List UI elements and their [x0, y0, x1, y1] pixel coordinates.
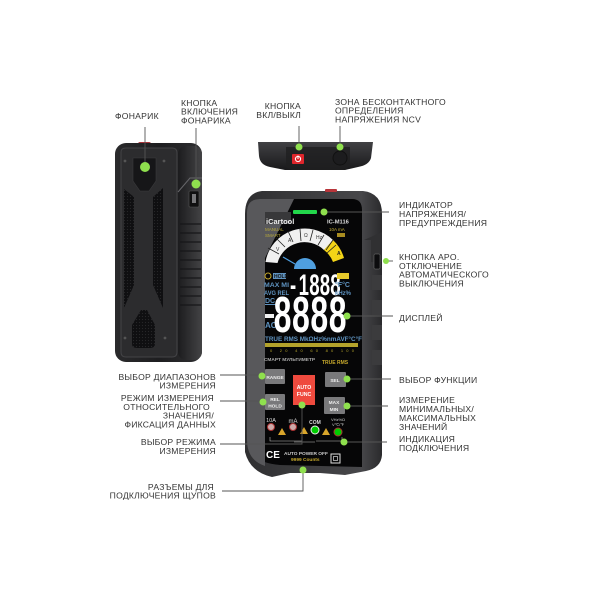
multimeter front: HOLD: [274, 274, 289, 280]
multimeter front: SMART: [265, 233, 281, 238]
red top button: [325, 189, 337, 192]
multimeter front: 9999 Counts: [291, 457, 320, 463]
label: NCV zone: ЗОНА БЕСКОНТАКТНОГО: [335, 97, 446, 107]
power button: [292, 154, 304, 164]
label: NCV zone: ОПРЕДЕЛЕНИЯ: [335, 106, 404, 116]
dial needle: [283, 257, 295, 264]
multimeter front: MAX: [329, 400, 340, 406]
rotary dial: Hz: [316, 235, 323, 241]
label: relative mode and data hold: ФИКСАЦИЯ ДАННЫХ: [124, 419, 216, 429]
multimeter front: AVG REL: [264, 290, 289, 297]
label: APO button: АВТОМАТИЧЕСКОГО: [399, 270, 489, 280]
label: measurement mode: ИЗМЕРЕНИЯ: [159, 446, 216, 456]
leader: flashlight: [140, 127, 150, 172]
multimeter front: IC-M116: [327, 220, 350, 226]
label: APO button: КНОПКА APO.: [399, 252, 460, 262]
terminals: V℃/℉: [332, 422, 344, 427]
mode labels: MANUAL: [265, 227, 284, 232]
leader: rel hold: [220, 398, 266, 406]
multimeter front: REL: [270, 397, 280, 403]
terminals: COM: [309, 420, 321, 426]
CE mark: CE: [266, 450, 280, 461]
multimeter front: AUTO: [297, 385, 311, 391]
minus sign: [265, 314, 274, 318]
device back view: [115, 142, 202, 362]
vents: [124, 189, 134, 308]
label: measurement mode: ВЫБОР РЕЖИМА: [141, 437, 216, 447]
dial symbols: V: [276, 247, 280, 253]
red top accent: [138, 142, 151, 147]
terminals: [266, 417, 345, 442]
label: voltage indicator: ИНДИКАТОР: [399, 200, 453, 210]
label: function select: ВЫБОР ФУНКЦИИ: [399, 375, 477, 385]
label: voltage indicator: ПРЕДУПРЕЖДЕНИЯ: [399, 218, 487, 228]
REL HOLD button: [265, 394, 285, 410]
NCV zone: [333, 151, 347, 165]
status icons: [265, 273, 271, 279]
label: probe sockets: РАЗЪЕМЫ ДЛЯ: [148, 482, 214, 492]
multimeter front: [245, 189, 382, 477]
label: flashlight button: КНОПКА: [181, 98, 217, 108]
voltage indicator bar: [293, 210, 317, 214]
SEL button: [325, 372, 346, 387]
multimeter front: MIN: [330, 407, 339, 413]
left indicators: MAX MI: [264, 282, 289, 289]
label: relative mode and data hold: ЗНАЧЕНИЯ/: [163, 411, 214, 421]
label: min max: МАКСИМАЛЬНЫХ: [399, 413, 476, 423]
leader: NCV zone: [336, 126, 344, 150]
multimeter front: 0 20 40 60 80 100: [270, 348, 355, 353]
leader: flashlight button: [192, 128, 200, 188]
leader: sel: [344, 376, 391, 382]
leader: measurement mode: [220, 402, 306, 444]
label: flashlight button: ВКЛЮЧЕНИЯ: [181, 107, 238, 117]
label: connection indication: ПОДКЛЮЧЕНИЯ: [399, 443, 469, 453]
multimeter front: DC: [265, 298, 275, 305]
label: display: ДИСПЛЕЙ: [399, 312, 443, 323]
leader: voltage indicator: [320, 208, 389, 216]
screws: [124, 160, 126, 162]
label: connection indication: ИНДИКАЦИЯ: [399, 434, 455, 444]
label: voltage indicator: НАПРЯЖЕНИЯ/: [399, 209, 467, 219]
label: probe sockets: ПОДКЛЮЧЕНИЯ ЩУПОВ: [110, 491, 216, 501]
APO side button: [374, 254, 380, 269]
label: power button: КНОПКА: [265, 101, 301, 111]
label: power button: ВКЛ/ВЫКЛ: [256, 110, 301, 120]
label: relative mode and data hold: ОТНОСИТЕЛЬНОГО: [123, 402, 210, 412]
label: flashlight button: ФОНАРИКА: [181, 115, 231, 125]
multimeter front: AC: [265, 321, 277, 330]
side ribs: [180, 224, 201, 305]
flashlight module: [133, 158, 156, 191]
double insulation mark: [331, 454, 340, 463]
body: [245, 191, 382, 477]
label: min max: МИНИМАЛЬНЫХ/: [399, 404, 474, 414]
device top view: [258, 142, 373, 170]
label: range select: ВЫБОР ДИАПАЗОНОВ: [118, 372, 216, 382]
rotary dial: A: [337, 251, 341, 257]
leader: power button: [296, 126, 302, 150]
label: min max: ЗНАЧЕНИЙ: [399, 421, 447, 432]
multimeter front: °F°C: [335, 281, 350, 289]
multimeter front: FUNC: [297, 392, 311, 398]
screen panel: [247, 199, 362, 467]
unit row: TRUE RMS MkΩHz%nmAVF°C°F: [265, 335, 362, 343]
AUTO FUNC button: [293, 375, 315, 405]
multimeter front: SEL: [330, 378, 340, 384]
label: NCV zone: НАПРЯЖЕНИЯ NCV: [335, 114, 421, 124]
multimeter front: HOLD: [268, 404, 282, 410]
bar graph: [265, 343, 358, 347]
multimeter front: kHz%: [335, 291, 352, 297]
leader: display: [344, 312, 393, 320]
main readout: 8888: [274, 287, 346, 343]
rotary dial: Ω: [304, 233, 308, 239]
terminals: VHz%Ω: [331, 417, 345, 422]
rotary dial: [266, 229, 344, 263]
secondary readout: -1888: [290, 270, 341, 302]
multimeter front: RANGE: [266, 375, 284, 381]
glossy reflection: [247, 199, 294, 466]
terminals: 10A: [266, 418, 276, 424]
multimeter front: TRUE RMS: [322, 360, 349, 366]
leader: probe sockets: [222, 466, 306, 491]
label: min max: ИЗМЕРЕНИЕ: [399, 395, 455, 405]
rotary dial: A: [288, 238, 292, 244]
product caption: СМАРТ МУЛЬТИМЕТР: [264, 357, 316, 363]
leader: APO button: [383, 258, 393, 264]
label: flashlight: ФОНАРИК: [115, 111, 159, 121]
leader: max min: [344, 402, 388, 410]
auto power off text: AUTO POWER OFF: [284, 451, 328, 457]
flashlight switch: [189, 191, 199, 207]
dial half disc: [294, 258, 316, 269]
multimeter front: 10A mA: [329, 227, 345, 232]
RANGE button: [265, 369, 285, 384]
leader: range: [220, 372, 266, 380]
label: relative mode and data hold: РЕЖИМ ИЗМЕРЕНИЯ: [121, 393, 214, 403]
label: range select: ИЗМЕРЕНИЯ: [159, 381, 216, 391]
back body: [115, 143, 202, 362]
label: APO button: ВЫКЛЮЧЕНИЯ: [399, 278, 464, 288]
MAX MIN button: [324, 397, 345, 414]
leader: connection indication: [340, 438, 387, 446]
brand and model: iCartool: [266, 217, 294, 226]
label: APO button: ОТКЛЮЧЕНИЕ: [399, 261, 462, 271]
terminals: mA: [288, 419, 298, 425]
